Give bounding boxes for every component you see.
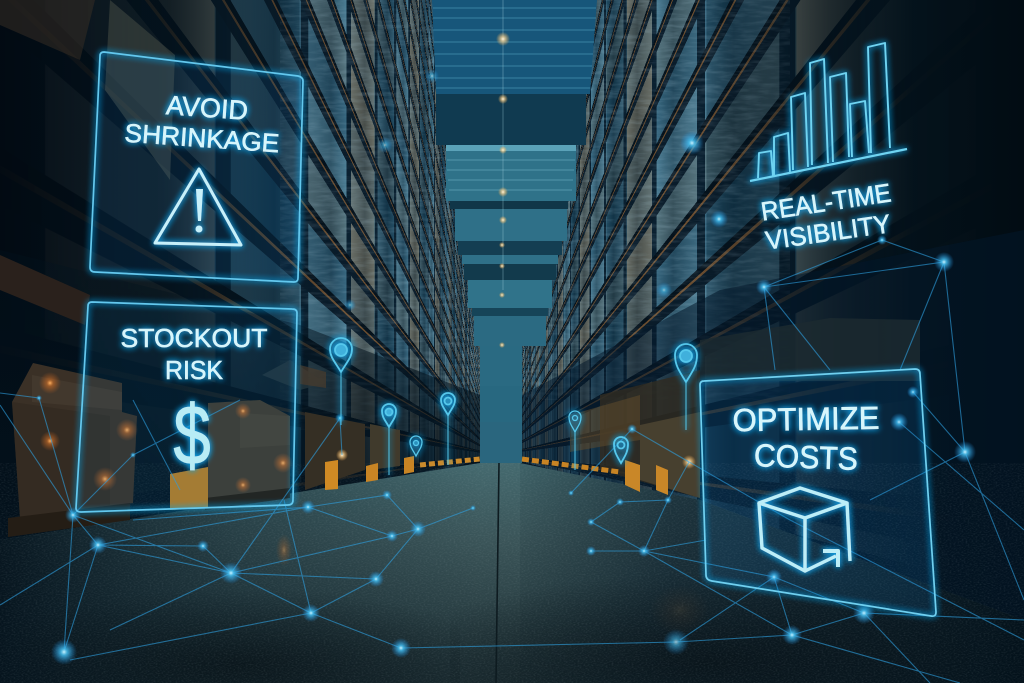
heading: avoid shrinkage: AVOID <box>165 90 249 126</box>
heading: avoid shrinkage <box>124 90 280 158</box>
left lower shelf shadow <box>0 250 480 545</box>
lower left pallet stacks <box>8 360 480 537</box>
panel: stockout risk <box>76 302 297 512</box>
heading: real-time visibility <box>759 177 893 256</box>
heading: optimize costs <box>732 400 880 477</box>
panel: optimize costs <box>700 369 936 616</box>
heading: optimize costs: COSTS <box>753 437 859 477</box>
pin 5 <box>675 344 697 430</box>
chart: bar outlines <box>750 43 907 181</box>
heading: stockout risk: STOCKOUT <box>120 323 268 353</box>
floor <box>0 463 1024 683</box>
panel: real-time visibility <box>750 43 907 256</box>
upper left dark pallets <box>0 0 175 325</box>
icon: box with arrow <box>759 488 850 571</box>
heading: real-time visibility: VISIBILITY <box>764 208 892 256</box>
data network lines <box>0 240 1024 683</box>
lower right pallet stacks <box>522 318 920 498</box>
pin 6 <box>569 411 581 470</box>
heading: avoid shrinkage: SHRINKAGE <box>124 118 280 158</box>
pin 3 <box>441 393 455 465</box>
heading: stockout risk: RISK <box>165 355 224 385</box>
pin 2 <box>382 404 396 475</box>
panel: avoid shrinkage <box>90 52 303 282</box>
heading: real-time visibility: REAL-TIME <box>759 177 893 227</box>
icon: dollar sign: $ <box>173 389 211 483</box>
pin 4 <box>410 436 422 456</box>
icon: warning triangle <box>155 169 241 245</box>
shelf surface texture right <box>522 0 790 400</box>
darkening over near right racking <box>700 0 1024 683</box>
heading: optimize costs: OPTIMIZE <box>732 400 880 438</box>
darkening over near left racking <box>0 0 340 560</box>
right lower shelf shadow <box>522 230 1024 620</box>
heading: stockout risk <box>120 323 268 385</box>
back wall and ceiling <box>432 0 597 463</box>
location pins <box>330 338 697 475</box>
pin 7 <box>614 437 628 463</box>
pin 1 <box>330 338 352 425</box>
ceiling lamps <box>496 32 510 348</box>
shelf surface texture left <box>280 0 480 430</box>
